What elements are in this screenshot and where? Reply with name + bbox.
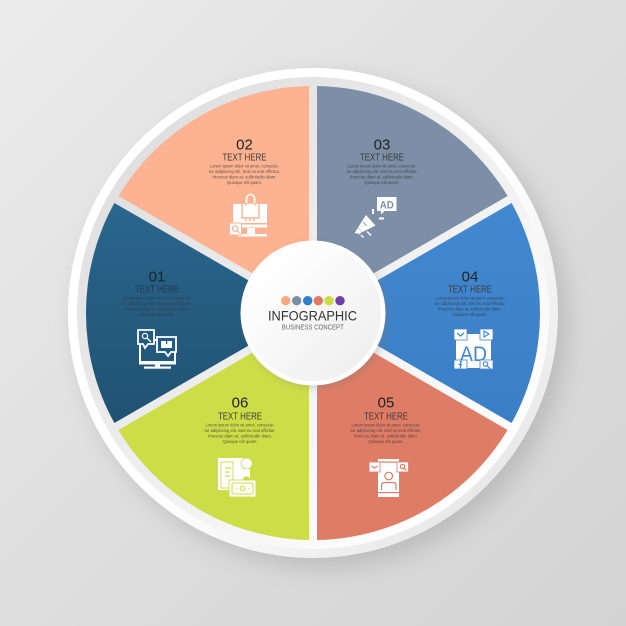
icon: AD with social corners: [454, 329, 493, 369]
icon: AD with social corners: AD: [460, 343, 487, 366]
text block 05: tur adipiscing elit. Sed eu erat efficitur,: [350, 428, 422, 433]
text block 05: [350, 394, 422, 444]
text block 05: 05: [378, 394, 394, 412]
text block 01: TEXT HERE: [135, 284, 179, 296]
segment 01: [86, 203, 305, 423]
text block 02: 02: [236, 136, 253, 154]
text block 06: tur adipiscing elit. Sed eu erat efficitur,: [204, 428, 276, 433]
text block 06: Quisque elit quam.: [222, 439, 258, 444]
text block 03: [346, 136, 418, 185]
icon: shopping bag on monitor: [230, 194, 267, 236]
text block 06: [204, 394, 276, 444]
segment 06: [118, 320, 309, 540]
text block 01: Quisque elit quam.: [140, 312, 174, 317]
text block 02: Lorem ipsum dolor sit amet, consecte-: [210, 164, 280, 168]
text block 01: [122, 268, 192, 317]
hub subtitle: BUSINESS CONCEPT: [282, 323, 344, 332]
text block 03: Quisque elit quam.: [364, 180, 400, 185]
icon: megaphone with AD bubble: AD: [380, 200, 394, 212]
text block 02: Quisque elit quam.: [227, 180, 262, 185]
text block 01: tur adipiscing elit. Sed eu erat efficitur,: [122, 301, 192, 306]
text block 03: Lorem ipsum dolor sit amet, consecte-: [348, 164, 417, 168]
text block 05: Lorem ipsum dolor sit amet, consecte-: [352, 422, 421, 428]
text block 01: Lorem ipsum dolor sit amet, consecte-: [122, 296, 192, 300]
icon: computer with search and chat bubbles: [138, 330, 176, 369]
text block 04: tur adipiscing elit. Sed eu erat efficitur,: [434, 301, 506, 306]
text block 05: TEXT HERE: [364, 412, 408, 422]
text block 04: Quisque elit quam.: [452, 312, 488, 317]
text block 04: TEXT HERE: [448, 284, 492, 296]
icon: megaphone with AD bubble: [355, 197, 396, 238]
icon: certificate and money: [218, 458, 256, 497]
text block 03: TEXT HERE: [360, 152, 404, 164]
center hub: [240, 240, 388, 388]
text block 02: rhoncus diam at, sollicitudin diam.: [212, 174, 276, 180]
text block 01: rhoncus diam at, sollicitudin diam.: [125, 306, 189, 312]
text block 06: Lorem ipsum dolor sit amet, consecte-: [206, 422, 275, 428]
text block 02: TEXT HERE: [222, 152, 267, 164]
segment 02: [118, 86, 309, 306]
text block 03: rhoncus diam at, sollicitudin diam.: [350, 174, 414, 180]
text block 05: rhoncus diam at, sollicitudin diam.: [354, 434, 418, 438]
segment 03: [317, 86, 508, 306]
text block 04: 04: [462, 268, 478, 286]
icon: person on smartphone: [369, 459, 408, 497]
segment 04: [321, 203, 540, 423]
text block 05: Quisque elit quam.: [368, 439, 404, 444]
text block 04: Lorem ipsum dolor sit amet, consecte-: [436, 296, 505, 300]
text block 06: TEXT HERE: [218, 412, 262, 422]
text block 04: [434, 268, 506, 317]
hub title: INFOGRAPHIC: [268, 308, 357, 324]
text block 06: rhoncus diam at, sollicitudin diam.: [208, 434, 272, 438]
text block 01: 01: [149, 268, 165, 286]
text block 03: tur adipiscing elit. Sed eu erat efficitur,: [346, 169, 418, 174]
color dots: [281, 296, 345, 305]
text block 02: tur adipiscing elit. Sed eu erat efficitur,: [209, 169, 280, 174]
outer ring: [68, 68, 568, 568]
text block 04: rhoncus diam at, sollicitudin diam.: [438, 306, 502, 312]
text block 02: [209, 136, 280, 185]
text block 03: 03: [374, 136, 390, 154]
text block 06: 06: [232, 394, 248, 412]
segment 05: [317, 320, 508, 540]
